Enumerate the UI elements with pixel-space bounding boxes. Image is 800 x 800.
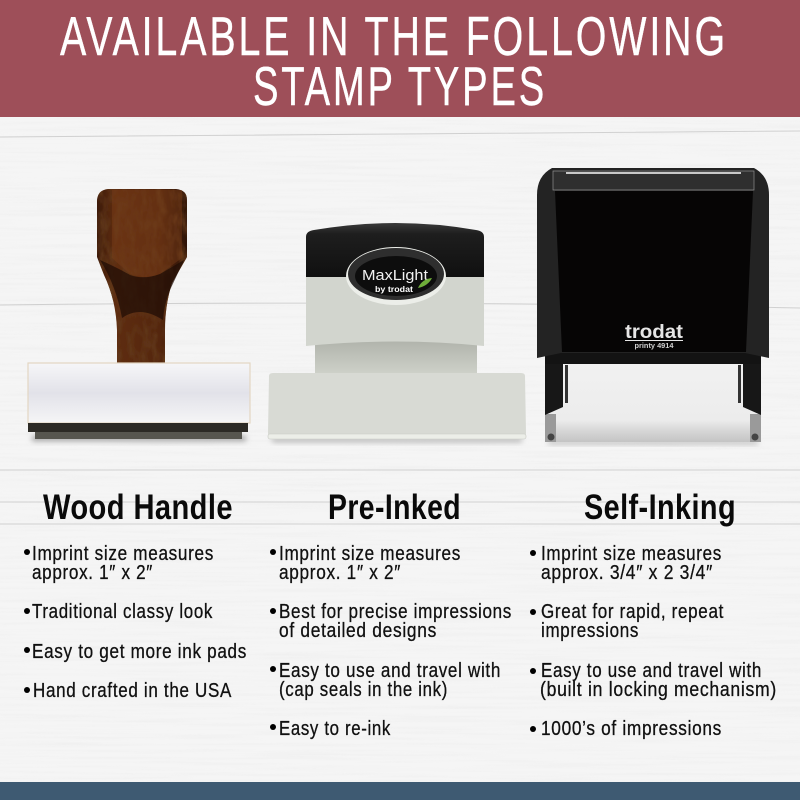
base: [268, 373, 526, 439]
bullet list: Imprint size measures: [541, 543, 722, 565]
black cap: [306, 223, 484, 277]
black body: [537, 168, 769, 358]
bottom band: [0, 782, 800, 800]
heading: Pre-Inked: [328, 488, 461, 527]
title: [60, 5, 728, 117]
oval logo: by trodat: [375, 285, 413, 294]
bullet list: of detailed designs: [279, 620, 437, 642]
grey cap: [306, 272, 484, 346]
shadow: [32, 436, 246, 441]
bullet list: approx. 1″ x 2″: [32, 562, 153, 584]
trodat logo: [625, 322, 684, 350]
white block: [28, 363, 250, 423]
bullet list: Easy to re-ink: [279, 718, 391, 740]
trodat logo: printy 4914: [634, 343, 674, 350]
oval logo: [346, 247, 446, 305]
top clear strip: [553, 171, 754, 190]
bullet list: impressions: [541, 620, 639, 642]
shadow: [272, 438, 522, 442]
bullet list: approx. 1″ x 2″: [279, 562, 401, 584]
column: self-inking: [530, 488, 777, 740]
bullet list: Easy to use and travel with: [541, 660, 762, 682]
bullet list: 1000’s of impressions: [541, 718, 722, 740]
heading: Wood Handle: [43, 488, 233, 527]
dark window: [555, 191, 753, 352]
bullet list: approx. 3/4″ x 2 3/4″: [541, 562, 713, 584]
self-inking stamp: [537, 168, 769, 444]
bullet list: Great for rapid, repeat: [541, 601, 724, 623]
bullet list: (cap seals in the ink): [279, 679, 448, 701]
legs: [545, 352, 761, 415]
rubber pad: [28, 423, 248, 439]
heading: Self-Inking: [584, 488, 736, 527]
bullet list: [24, 543, 247, 702]
wooden handle: [97, 189, 187, 365]
bullet list: Imprint size measures: [279, 543, 461, 565]
title: STAMP TYPES: [253, 55, 547, 117]
bullet list: Easy to get more ink pads: [32, 641, 247, 663]
neck: [315, 340, 477, 373]
oval logo: MaxLight: [362, 267, 429, 284]
clear base: [545, 364, 761, 442]
bullet list: [270, 543, 512, 740]
pre-inked stamp: [268, 223, 526, 442]
bullet list: Easy to use and travel with: [279, 660, 501, 682]
trodat logo: trodat: [625, 322, 684, 343]
wood handle stamp: [28, 189, 250, 441]
shadow: [548, 441, 758, 444]
bullet list: Hand crafted in the USA: [33, 680, 232, 702]
column: pre-inked: [270, 488, 512, 740]
bullet list: Traditional classy look: [32, 601, 213, 623]
bullet list: Best for precise impressions: [279, 601, 512, 623]
column: wood handle: [24, 488, 247, 702]
bullet list: [530, 543, 777, 740]
bullet list: Imprint size measures: [32, 543, 214, 565]
title banner: [0, 0, 800, 117]
